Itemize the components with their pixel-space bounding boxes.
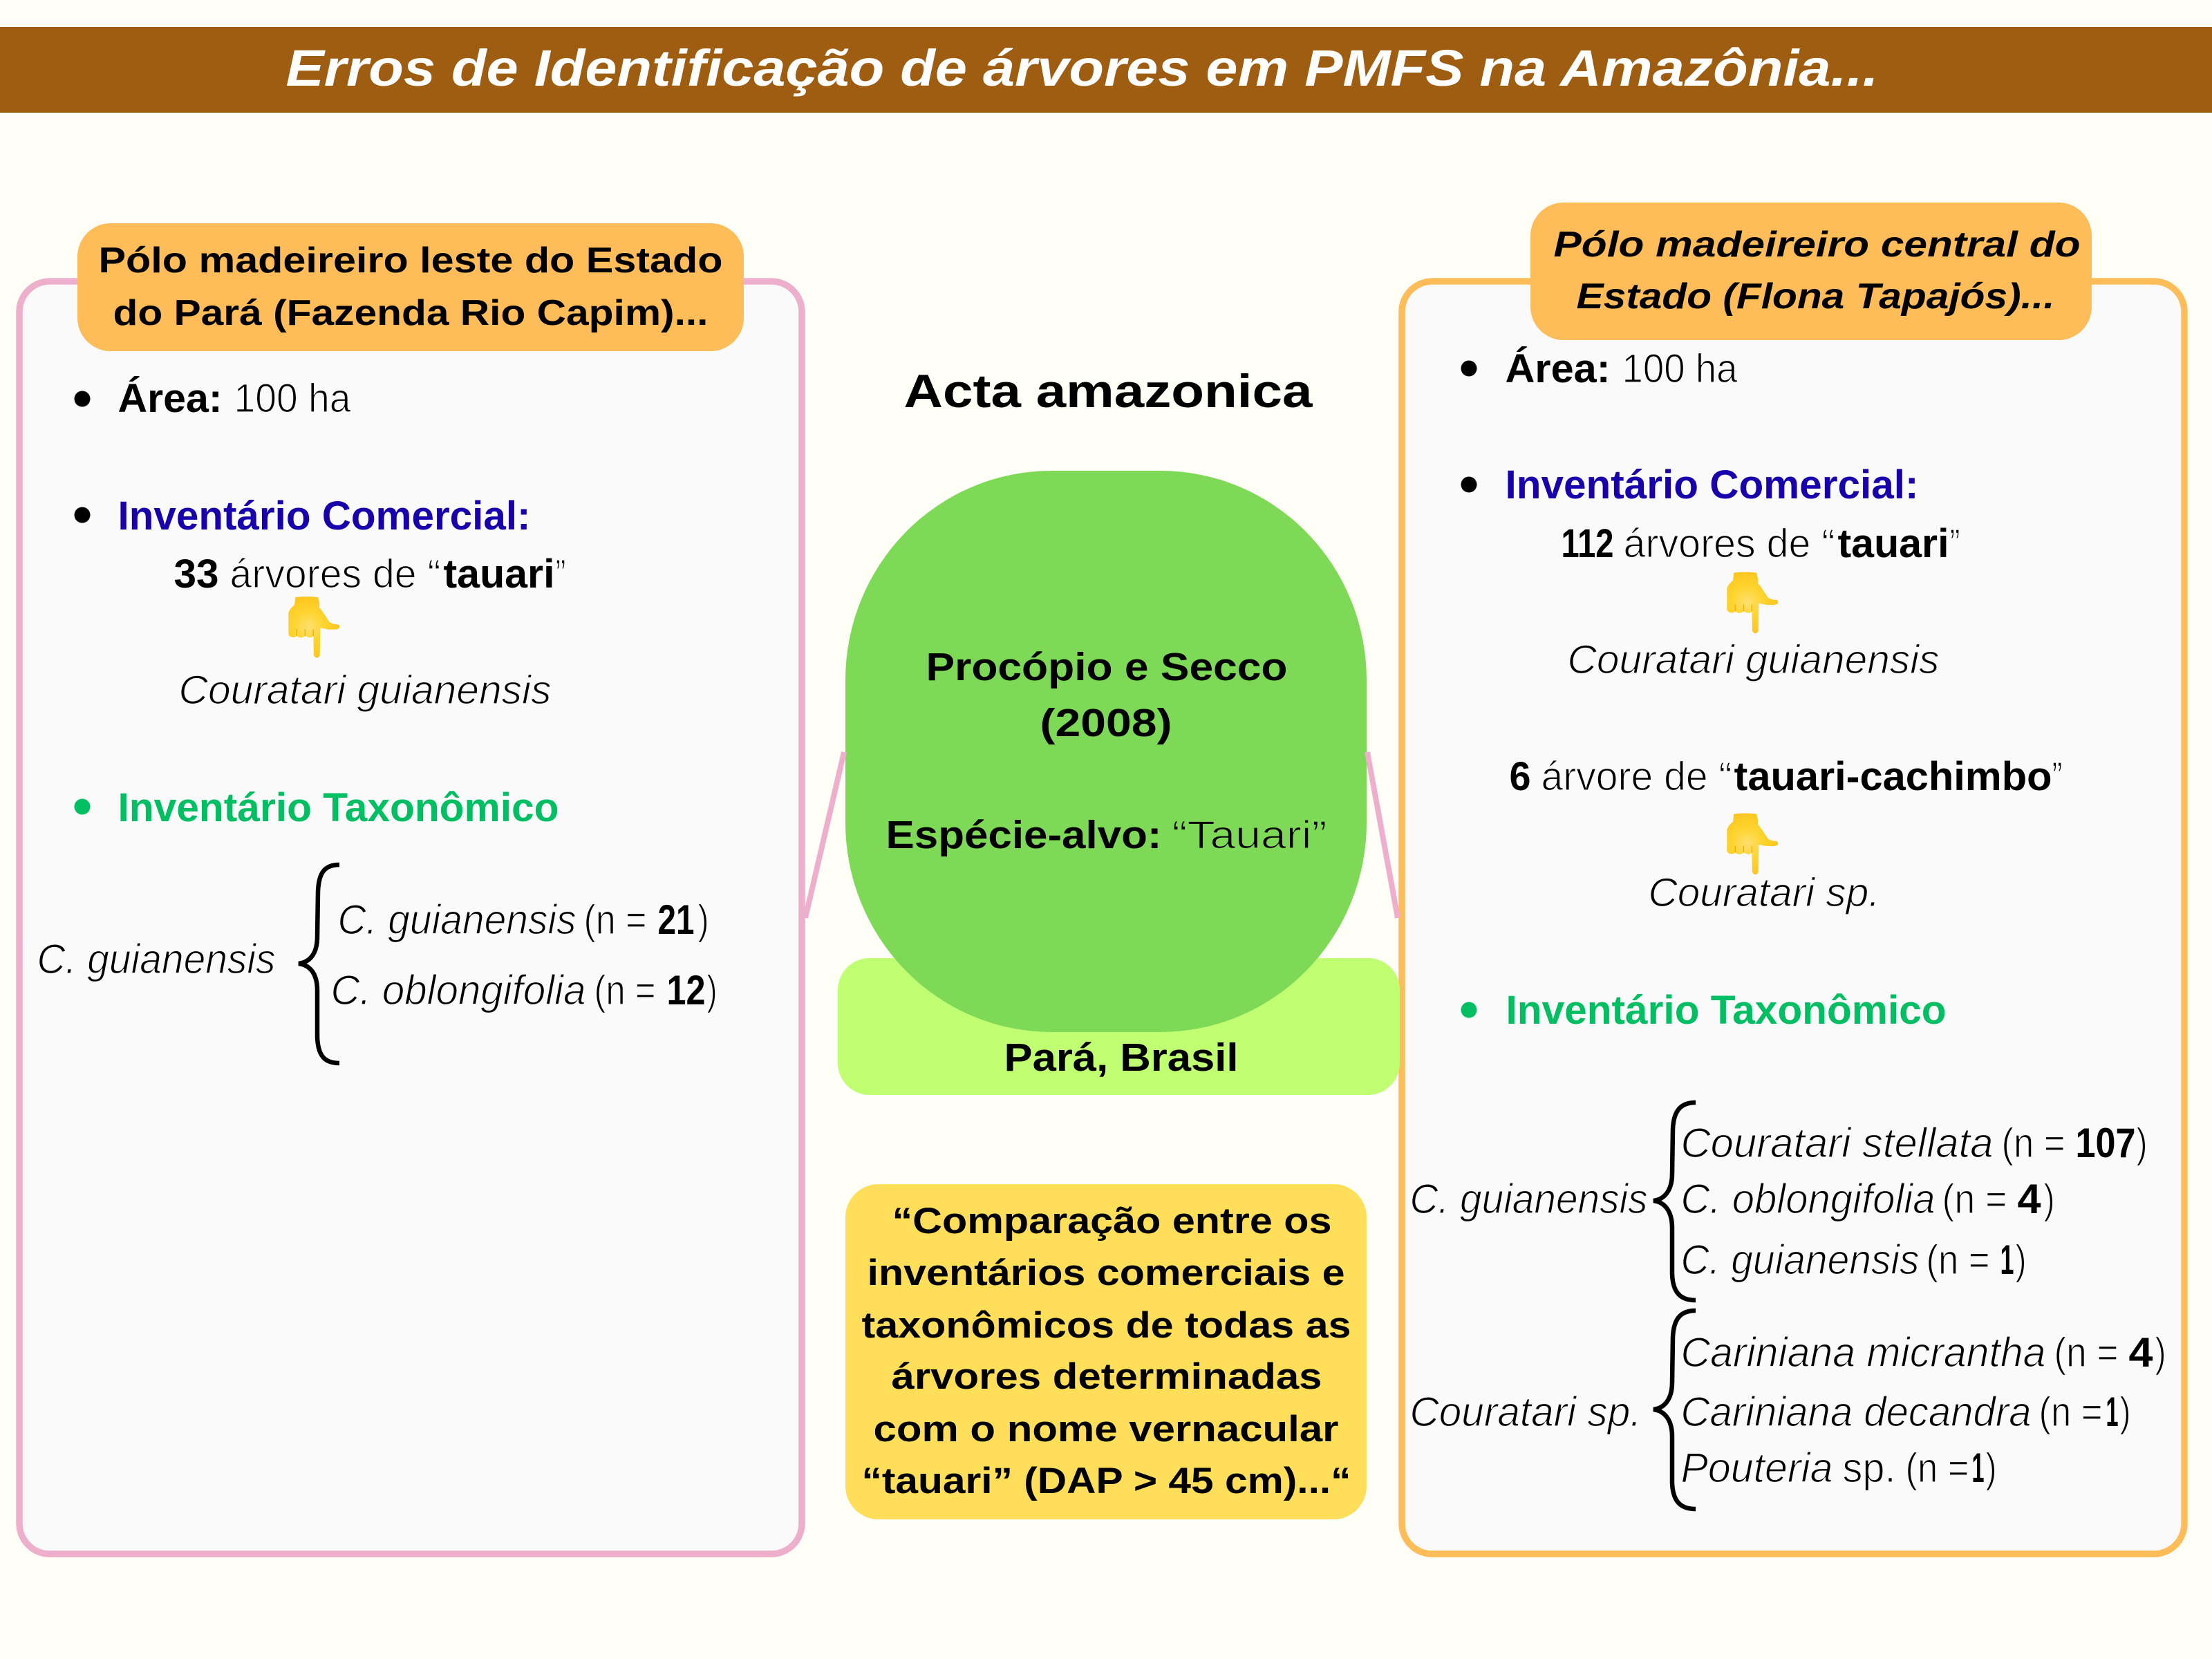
row: Couratari stellata 107: (n = [2002,1120,2065,1166]
left species name: Couratari guianensis [178,668,552,713]
brace [1653,1103,1696,1300]
right count of tauari trees: 112 [1561,521,1613,566]
left panel heading: do Pará (Fazenda Rio Capim)... [113,293,708,333]
right panel heading: Estado (Flona Tapajós)... [1576,276,2054,317]
row: Couratari stellata 107 [1681,1120,2147,1166]
right panel heading [1530,203,2092,340]
left panel heading [77,223,744,351]
right count of tauari trees: tauari [1837,521,1949,566]
row: C. guianensis 21: (n = [583,897,647,943]
icon: pointing down hand [288,597,339,658]
row: Couratari stellata 107: Couratari stellata [1681,1120,1994,1166]
central study shape [845,471,1367,1032]
row: C. oblongifolia 4: ) [2043,1176,2054,1222]
right taxonomic breakdown: C. guianensis [1410,1103,2147,1300]
quote callout: “tauari” (DAP > 45 cm)...“ [861,1461,1351,1501]
row: C. guianensis 1: (n = [1926,1237,1989,1283]
quote callout: inventários comerciais e [867,1253,1345,1293]
row: C. oblongifolia 12: C. oblongifolia [330,967,586,1013]
right commercial inventory heading: Inventário Comercial: [1506,462,1919,507]
icon: pointing down hand [1727,572,1778,633]
central study shape: Espécie-alvo: [886,813,1161,857]
right genus name: Couratari sp. [1648,870,1880,915]
right count of tauari-cachimbo trees: árvore de “ [1541,754,1732,799]
quote callout: árvores determinadas [892,1356,1322,1397]
row: Pouteria sp. 1: ) [1985,1445,1996,1491]
row: Pouteria sp. 1 [1681,1445,1996,1491]
left area bullet: Área: [118,376,223,421]
left taxonomic inventory heading: Inventário Taxonômico [118,785,559,830]
row: Cariniana micrantha 4: Cariniana micrantha [1681,1329,2046,1376]
row: C. oblongifolia 12: ) [706,967,718,1013]
central study shape: (2008) [1040,701,1172,745]
row: C. oblongifolia 4: C. oblongifolia [1681,1176,1936,1222]
row: C. guianensis 21: ) [698,897,709,943]
central study shape: Procópio e Secco [926,645,1287,689]
row: Couratari stellata 107: ) [2136,1120,2147,1166]
quote callout: taxonômicos de todas as [861,1305,1351,1346]
row: Couratari stellata 107: 107 [2075,1120,2136,1166]
right count of tauari-cachimbo trees: 6 [1510,754,1530,799]
panel: left, eastern timber hub [19,223,802,1554]
right area bullet: Área: [1506,346,1611,391]
right taxonomic breakdown: Couratari sp. [1410,1311,2166,1509]
right count of tauari trees: ” [1949,521,1960,566]
left panel heading: Pólo madeireiro leste do Estado [98,241,723,281]
left commercial inventory heading: Inventário Comercial: [118,494,531,538]
right taxonomic inventory heading: Inventário Taxonômico [1506,988,1947,1033]
quote callout: com o nome vernacular [874,1409,1338,1450]
row: C. oblongifolia 4: (n = [1942,1176,2007,1222]
right taxonomic breakdown: C. guianensis: C. guianensis [1410,1176,1648,1222]
row: Cariniana decandra 1: (n = [2039,1389,2103,1435]
icon: pointing down hand [1727,813,1778,874]
row: C. guianensis 21: 21 [658,897,694,943]
row: C. guianensis 21: C. guianensis [337,897,577,943]
row: C. oblongifolia 4: 4 [2017,1176,2041,1222]
right count of tauari-cachimbo trees: tauari-cachimbo [1734,754,2052,799]
right species name: Couratari guianensis [1568,637,1940,682]
row: Cariniana micrantha 4: (n = [2054,1329,2118,1376]
connector: left [805,752,844,918]
left count of tauari trees [174,552,565,597]
location box [838,958,1400,1095]
row: Cariniana decandra 1: Cariniana decandra [1681,1389,2031,1435]
left count of tauari trees: tauari [444,552,554,597]
row: Pouteria sp. 1: (n = [1905,1445,1969,1491]
right panel heading: Pólo madeireiro central do [1554,225,2081,265]
row: Cariniana micrantha 4: 4 [2129,1329,2153,1376]
right count of tauari trees: árvores de “ [1623,521,1835,566]
left count of tauari trees: árvores de “ [229,552,441,597]
right count of tauari-cachimbo trees [1510,754,2063,799]
row: C. oblongifolia 12: 12 [666,967,705,1013]
title: Erros de Identificação de árvores em PMFS na Amazônia... [286,39,1879,97]
right count of tauari-cachimbo trees: ” [2052,754,2063,799]
left count of tauari trees: 33 [174,552,218,597]
row: C. guianensis 21 [337,897,709,943]
row: Cariniana decandra 1: ) [2119,1389,2130,1435]
row: C. oblongifolia 12: (n = [594,967,655,1013]
right count of tauari trees [1561,521,1960,566]
row: Pouteria sp. 1: 1 [1971,1445,1984,1491]
row: Pouteria sp. 1: Pouteria [1681,1445,1833,1491]
title banner [0,27,2212,113]
brace [299,865,339,1063]
row: Cariniana decandra 1: 1 [2106,1389,2118,1435]
row: C. guianensis 1: C. guianensis [1681,1237,1919,1283]
left count of tauari trees: ” [556,552,565,597]
central study shape: “Tauari” [1172,813,1327,857]
location box: Pará, Brasil [1004,1035,1239,1080]
left area bullet: 100 ha [234,376,351,421]
connector: right [1367,752,1398,918]
quote callout [845,1184,1367,1519]
right taxonomic breakdown: Couratari sp.: Couratari sp. [1410,1389,1641,1435]
row: Pouteria sp. 1: sp. [1843,1445,1895,1491]
row: C. oblongifolia 12 [330,967,718,1013]
left area bullet [75,376,351,421]
right area bullet [1461,346,1738,391]
row: C. guianensis 1: 1 [2000,1237,2014,1283]
quote callout: “Comparação entre os [892,1201,1331,1241]
brace [1653,1311,1696,1509]
row: C. guianensis 1: ) [2016,1237,2027,1283]
left taxonomic breakdown [37,865,718,1063]
journal name: Acta amazonica [904,365,1313,418]
row: Cariniana micrantha 4: ) [2155,1329,2166,1376]
panel: right, central timber hub [1402,203,2184,1554]
left taxonomic breakdown: C. guianensis [37,936,275,982]
right area bullet: 100 ha [1622,346,1738,391]
